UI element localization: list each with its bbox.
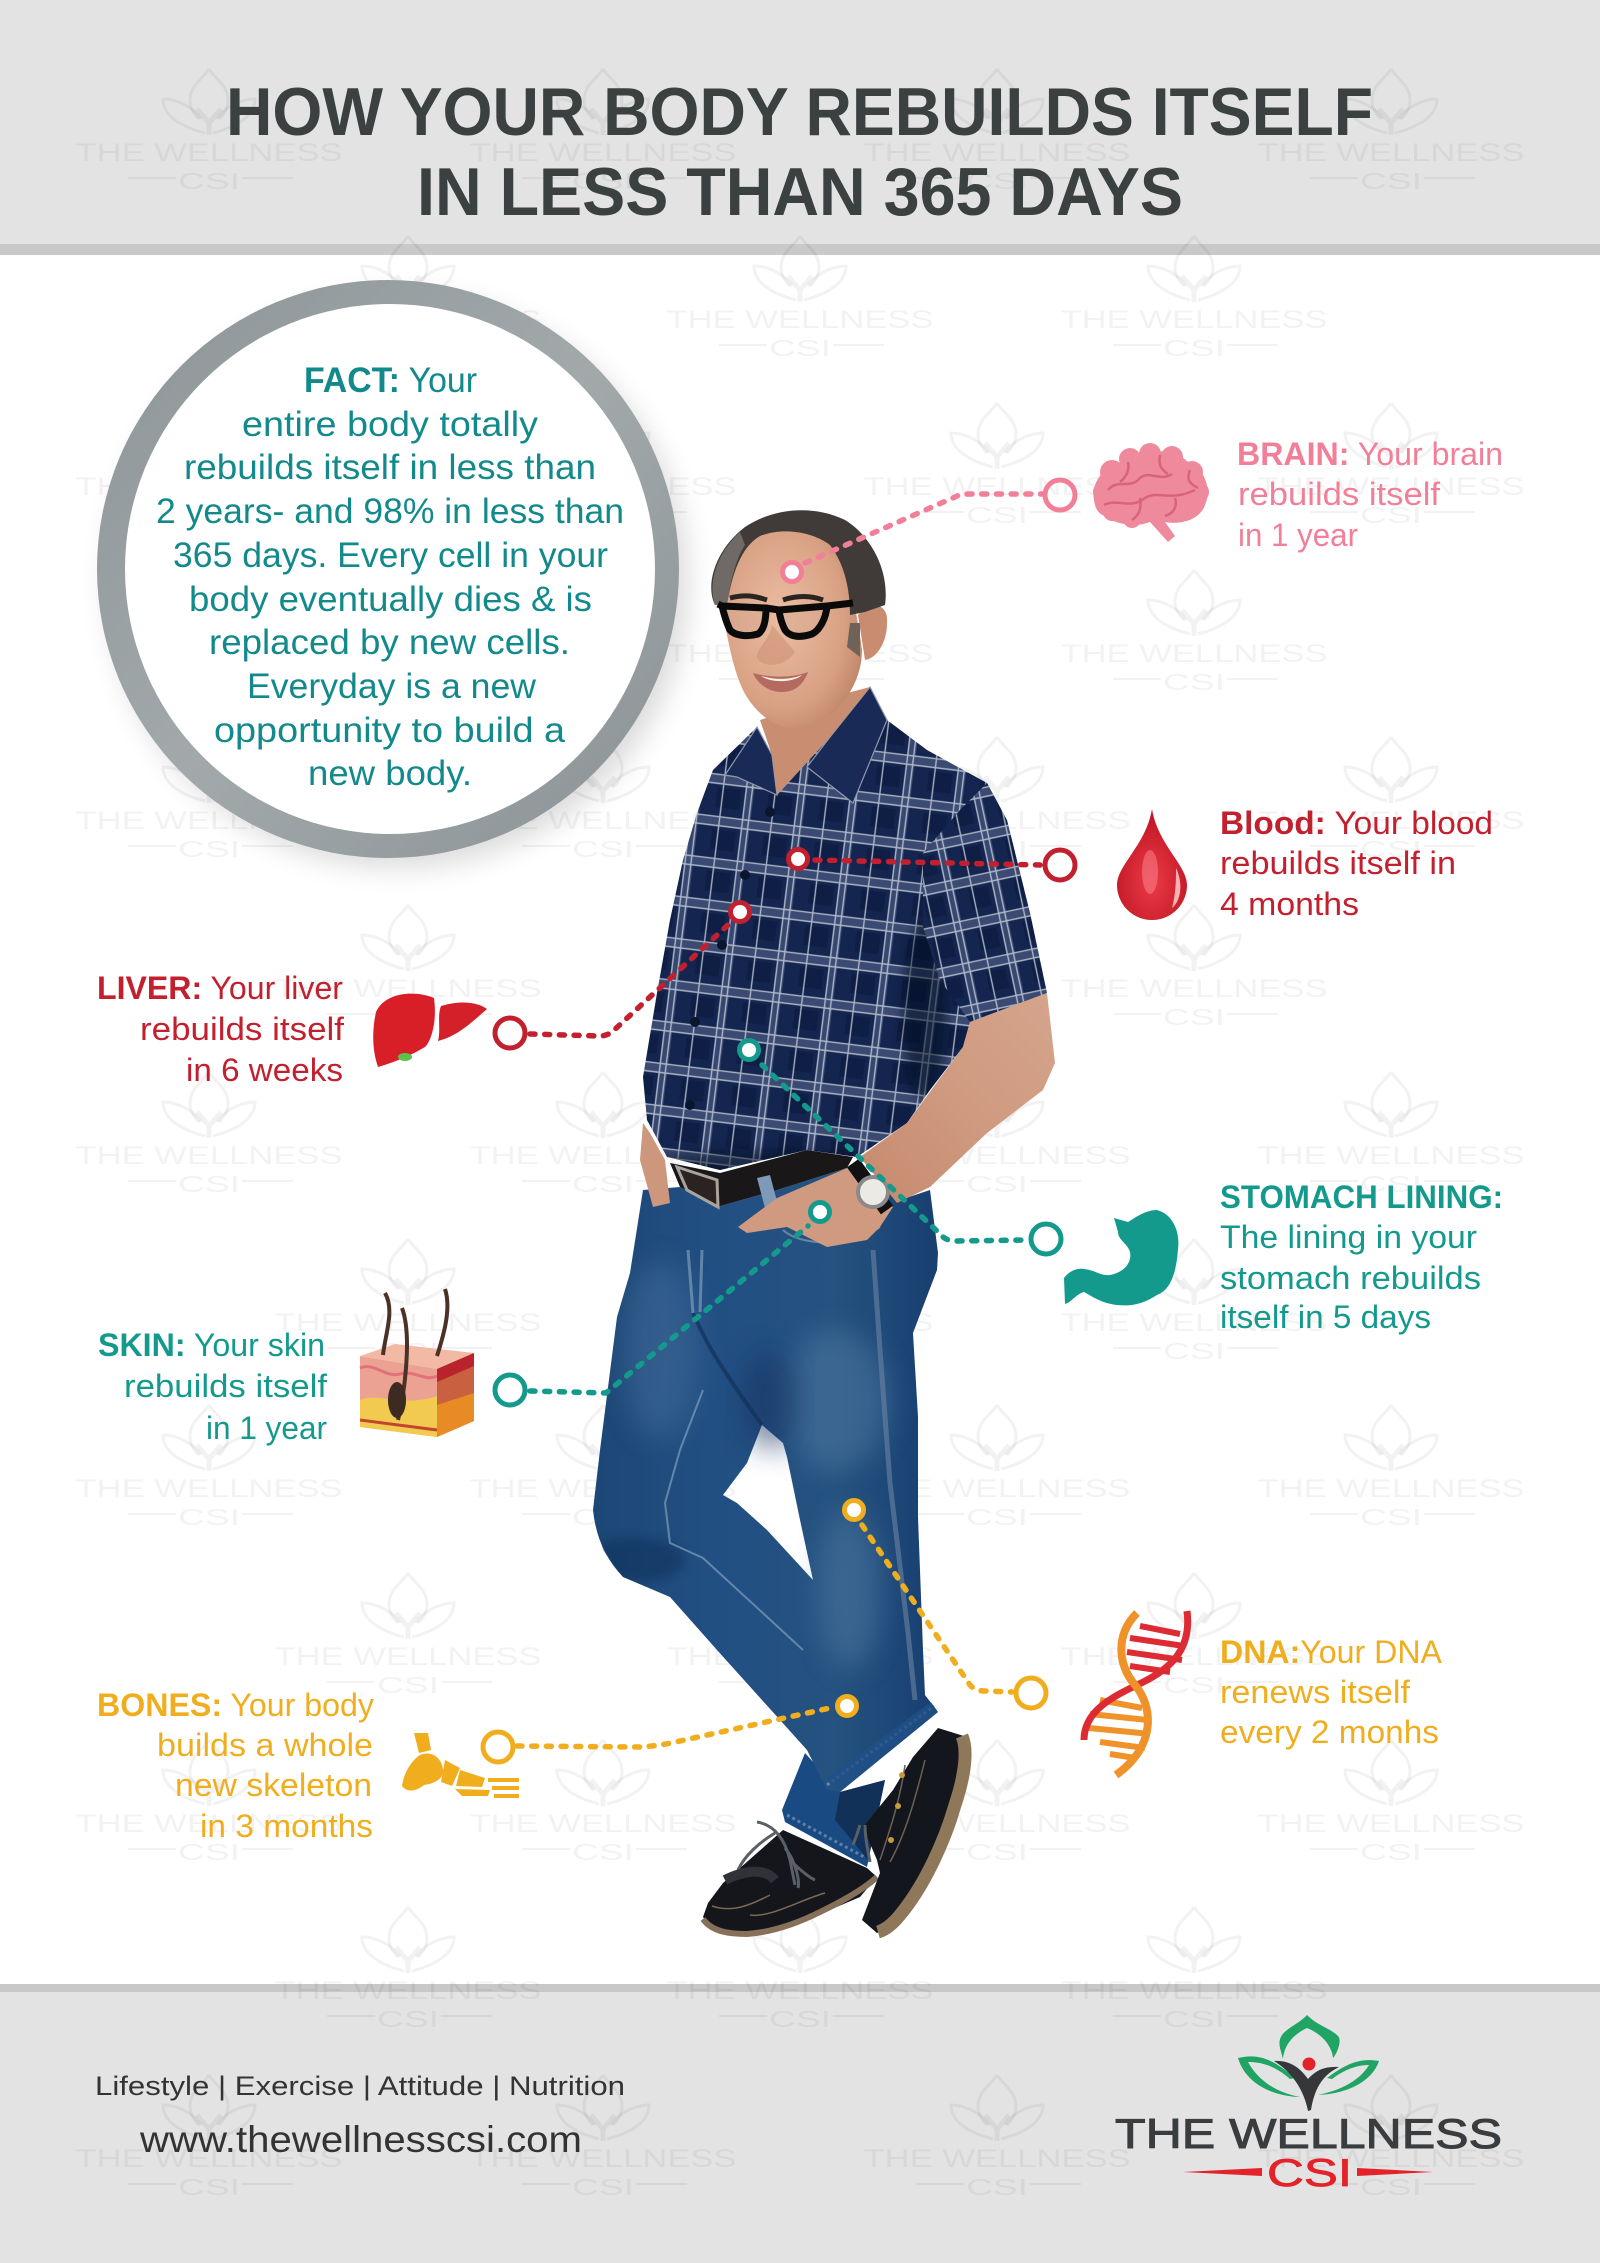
watermark layer: CSI	[1360, 2174, 1422, 2200]
label: bones: new skeleton	[175, 1767, 372, 1803]
watermark layer: CSI	[1163, 2006, 1225, 2032]
logo CSI	[1183, 2152, 1433, 2195]
logo CSI: CSI	[1267, 2152, 1352, 2195]
right hand and watch	[738, 1163, 893, 1247]
watermark layer: CSI	[769, 1672, 831, 1698]
watermark layer: CSI	[377, 1004, 439, 1030]
panel: fact circle	[97, 280, 688, 868]
label: bones: builds a whole	[157, 1727, 373, 1763]
header band	[0, 0, 1600, 255]
watermark layer: CSI	[966, 1171, 1028, 1197]
watermark layer: CSI	[572, 1171, 634, 1197]
logo: The Wellness CSI	[1115, 2015, 1502, 2195]
rear lower leg	[782, 1753, 885, 1867]
label: brain: BRAIN: Your brain	[1237, 436, 1503, 472]
watermark layer: CSI	[377, 1672, 439, 1698]
watermark layer: THE WELLNESS	[864, 1810, 1130, 1838]
footer website: www.thewellnesscsi.com	[139, 2119, 582, 2160]
eyebrows	[730, 596, 823, 600]
watermark layer: CSI	[377, 2006, 439, 2032]
watermark layer: THE WELLNESS	[864, 1475, 1130, 1503]
connector: stomach	[740, 1040, 1061, 1254]
watermark layer: THE WELLNESS	[470, 807, 736, 835]
watermark layer: CSI	[769, 335, 831, 361]
watermark layer: THE WELLNESS	[864, 807, 1130, 835]
watermark layer: THE WELLNESS	[76, 1142, 342, 1170]
fact text: Everyday is a new	[247, 667, 537, 706]
label: blood: Blood: Your blood	[1220, 805, 1493, 841]
jeans	[585, 1168, 938, 1792]
photo: smiling man	[585, 510, 1055, 1935]
watermark layer: CSI	[966, 1504, 1028, 1530]
connector: DNA	[844, 1500, 1046, 1708]
watermark layer: THE WELLNESS	[1060, 1309, 1328, 1337]
watermark layer: THE WELLNESS	[666, 1977, 934, 2005]
watermark layer: CSI	[1360, 502, 1422, 528]
watermark layer: THE WELLNESS	[864, 473, 1130, 501]
watermark layer: THE WELLNESS	[470, 1475, 736, 1503]
collar	[725, 687, 887, 803]
watermark layer: CSI	[1360, 168, 1422, 194]
watermark layer: THE WELLNESS	[1258, 473, 1524, 501]
watermark layer: CSI	[769, 2006, 831, 2032]
watermark layer: CSI	[377, 335, 439, 361]
watermark layer: CSI	[178, 168, 240, 194]
watermark layer: THE WELLNESS	[1258, 1810, 1524, 1838]
neck	[760, 687, 870, 795]
title: HOW YOUR BODY REBUILDS ITSELF	[226, 74, 1373, 150]
watermark layer: THE WELLNESS	[76, 139, 342, 167]
watermark layer: THE WELLNESS	[666, 975, 934, 1003]
icon: brain	[1093, 443, 1209, 542]
shoe: rear	[703, 1822, 877, 1935]
watermark layer: THE WELLNESS	[1060, 975, 1328, 1003]
head	[711, 510, 887, 728]
ear	[858, 605, 887, 660]
watermark layer: CSI	[966, 168, 1028, 194]
watermark layer: THE WELLNESS	[470, 473, 736, 501]
label: stomach lining: The lining in your	[1220, 1219, 1477, 1255]
label: liver: rebuilds itself	[140, 1011, 344, 1047]
title	[226, 74, 1373, 230]
connector: bones	[483, 1696, 856, 1762]
label: blood: rebuilds itself in	[1220, 845, 1456, 881]
fact text: body eventually dies & is	[189, 580, 592, 619]
watermark layer: THE WELLNESS	[1258, 807, 1524, 835]
connector: liver	[495, 902, 750, 1048]
watermark layer: THE WELLNESS	[864, 1142, 1130, 1170]
label: skin: SKIN: Your skin	[98, 1327, 325, 1363]
watermark layer: THE WELLNESS	[76, 2145, 342, 2173]
label: bones: in 3 months	[200, 1808, 373, 1844]
label: bones: BONES: Your body	[97, 1687, 374, 1723]
watermark layer: CSI	[178, 502, 240, 528]
watermark layer: CSI	[966, 502, 1028, 528]
title: IN LESS THAN 365 DAYS	[417, 154, 1183, 230]
label: skin: in 1 year	[206, 1410, 327, 1446]
watermark layer: CSI	[572, 502, 634, 528]
watermark layer: CSI	[572, 1839, 634, 1865]
watermark layer: CSI	[178, 2174, 240, 2200]
fact text: opportunity to build a	[214, 711, 566, 750]
nose	[757, 625, 795, 665]
icon: blood drop	[1117, 809, 1187, 920]
watermark layer: CSI	[178, 1839, 240, 1865]
icon: foot bones	[402, 1733, 519, 1798]
label: liver	[97, 970, 344, 1088]
watermark layer: CSI	[1163, 669, 1225, 695]
watermark layer: CSI	[769, 669, 831, 695]
watermark layer: THE WELLNESS	[864, 139, 1130, 167]
watermark layer: CSI	[1163, 1004, 1225, 1030]
watermark layer: THE WELLNESS	[274, 640, 542, 668]
label: liver: LIVER: Your liver	[97, 970, 343, 1006]
watermark layer: THE WELLNESS	[1060, 1643, 1328, 1671]
connector: brain	[782, 480, 1075, 582]
label: brain: rebuilds itself	[1238, 476, 1440, 512]
connector: skin	[495, 1202, 830, 1405]
icon: stomach	[1064, 1210, 1178, 1305]
watermark layer: THE WELLNESS	[76, 807, 342, 835]
watermark layer: CSI	[769, 1004, 831, 1030]
sideburn	[847, 623, 860, 657]
watermark layer: THE WELLNESS	[1060, 640, 1328, 668]
watermark layer: THE WELLNESS	[666, 640, 934, 668]
watermark layer: CSI	[178, 1171, 240, 1197]
watermark layer: THE WELLNESS	[666, 306, 934, 334]
watermark layer: THE WELLNESS	[274, 1977, 542, 2005]
label: liver: in 6 weeks	[186, 1052, 343, 1088]
label: DNA: renews itself	[1220, 1674, 1410, 1710]
footer band	[0, 1984, 1600, 2263]
watermark layer: THE WELLNESS	[274, 975, 542, 1003]
watermark layer: THE WELLNESS	[666, 1309, 934, 1337]
shoe: front	[853, 1728, 967, 1933]
label: blood	[1220, 805, 1493, 922]
label: DNA	[1220, 1634, 1443, 1750]
fact text: FACT: Your	[304, 361, 477, 400]
watermark layer: THE WELLNESS	[76, 473, 342, 501]
label: blood: 4 months	[1220, 886, 1359, 922]
label: brain	[1237, 436, 1503, 553]
fact text: 365 days. Every cell in your	[173, 536, 608, 575]
footer tagline: Lifestyle | Exercise | Attitude | Nutrition	[95, 2071, 625, 2101]
watermark layer: CSI	[377, 669, 439, 695]
watermark layer: THE WELLNESS	[666, 1643, 934, 1671]
watermark layer: CSI	[572, 1504, 634, 1530]
label: DNA: DNA:Your DNA	[1220, 1634, 1443, 1670]
icon: liver	[373, 994, 487, 1067]
logo mark	[1238, 2015, 1379, 2111]
hair	[711, 510, 886, 615]
label: DNA: every 2 monhs	[1220, 1714, 1439, 1750]
watermark layer: THE WELLNESS	[1258, 139, 1524, 167]
watermark layer: THE WELLNESS	[274, 1643, 542, 1671]
fact text: replaced by new cells.	[209, 623, 570, 662]
watermark layer: THE WELLNESS	[1060, 306, 1328, 334]
fact text	[156, 361, 624, 793]
watermark layer: THE WELLNESS	[1258, 1475, 1524, 1503]
watermark layer: CSI	[966, 1839, 1028, 1865]
watermark layer: CSI	[1360, 1504, 1422, 1530]
label: stomach lining: STOMACH LINING:	[1220, 1179, 1503, 1215]
label: stomach lining: itself in 5 days	[1220, 1299, 1431, 1335]
watermark layer: CSI	[377, 1338, 439, 1364]
watermark layer: CSI	[769, 1338, 831, 1364]
watermark layer: THE WELLNESS	[470, 139, 736, 167]
fact text: 2 years- and 98% in less than	[156, 492, 624, 531]
watermark layer: THE WELLNESS	[76, 1475, 342, 1503]
watermark layer: THE WELLNESS	[470, 2145, 736, 2173]
watermark layer: CSI	[178, 836, 240, 862]
watermark layer: THE WELLNESS	[274, 306, 542, 334]
watermark layer: THE WELLNESS	[1258, 1142, 1524, 1170]
watermark layer: THE WELLNESS	[76, 1810, 342, 1838]
logo wordmark: THE WELLNESS	[1115, 2110, 1502, 2157]
watermark layer: CSI	[1360, 836, 1422, 862]
watermark layer: THE WELLNESS	[1258, 2145, 1524, 2173]
label: bones	[97, 1687, 374, 1844]
watermark layer: THE WELLNESS	[1060, 1977, 1328, 2005]
watermark layer: CSI	[966, 2174, 1028, 2200]
watermark layer: CSI	[966, 836, 1028, 862]
watermark layer: CSI	[1360, 1171, 1422, 1197]
watermark layer: CSI	[178, 1504, 240, 1530]
watermark layer: CSI	[572, 2174, 634, 2200]
belt	[670, 1150, 853, 1208]
watermark layer: THE WELLNESS	[864, 2145, 1130, 2173]
icon: skin	[360, 1289, 474, 1437]
shirt	[640, 687, 1047, 1179]
watermark layer: THE WELLNESS	[470, 1810, 736, 1838]
label: stomach lining	[1220, 1179, 1503, 1335]
watermark layer: CSI	[1163, 1672, 1225, 1698]
label: skin	[98, 1327, 327, 1446]
right arm	[860, 993, 1055, 1203]
glasses	[718, 603, 853, 636]
fact text: rebuilds itself in less than	[184, 448, 596, 487]
label: stomach lining: stomach rebuilds	[1220, 1260, 1481, 1296]
face	[724, 528, 862, 728]
watermark layer: THE WELLNESS	[274, 1309, 542, 1337]
connector: blood	[788, 850, 1075, 880]
smile	[753, 672, 808, 692]
fact text: new body.	[308, 754, 472, 793]
label: brain: in 1 year	[1238, 517, 1358, 553]
watermark layer: CSI	[572, 168, 634, 194]
icon: DNA	[1084, 1611, 1188, 1775]
left hand	[640, 1123, 670, 1207]
watermark layer: THE WELLNESS	[470, 1142, 736, 1170]
watermark layer: CSI	[1360, 1839, 1422, 1865]
watermark layer: CSI	[1163, 1338, 1225, 1364]
watermark layer: CSI	[572, 836, 634, 862]
fact text: entire body totally	[242, 405, 539, 444]
watermark layer: CSI	[1163, 335, 1225, 361]
label: skin: rebuilds itself	[124, 1368, 327, 1404]
